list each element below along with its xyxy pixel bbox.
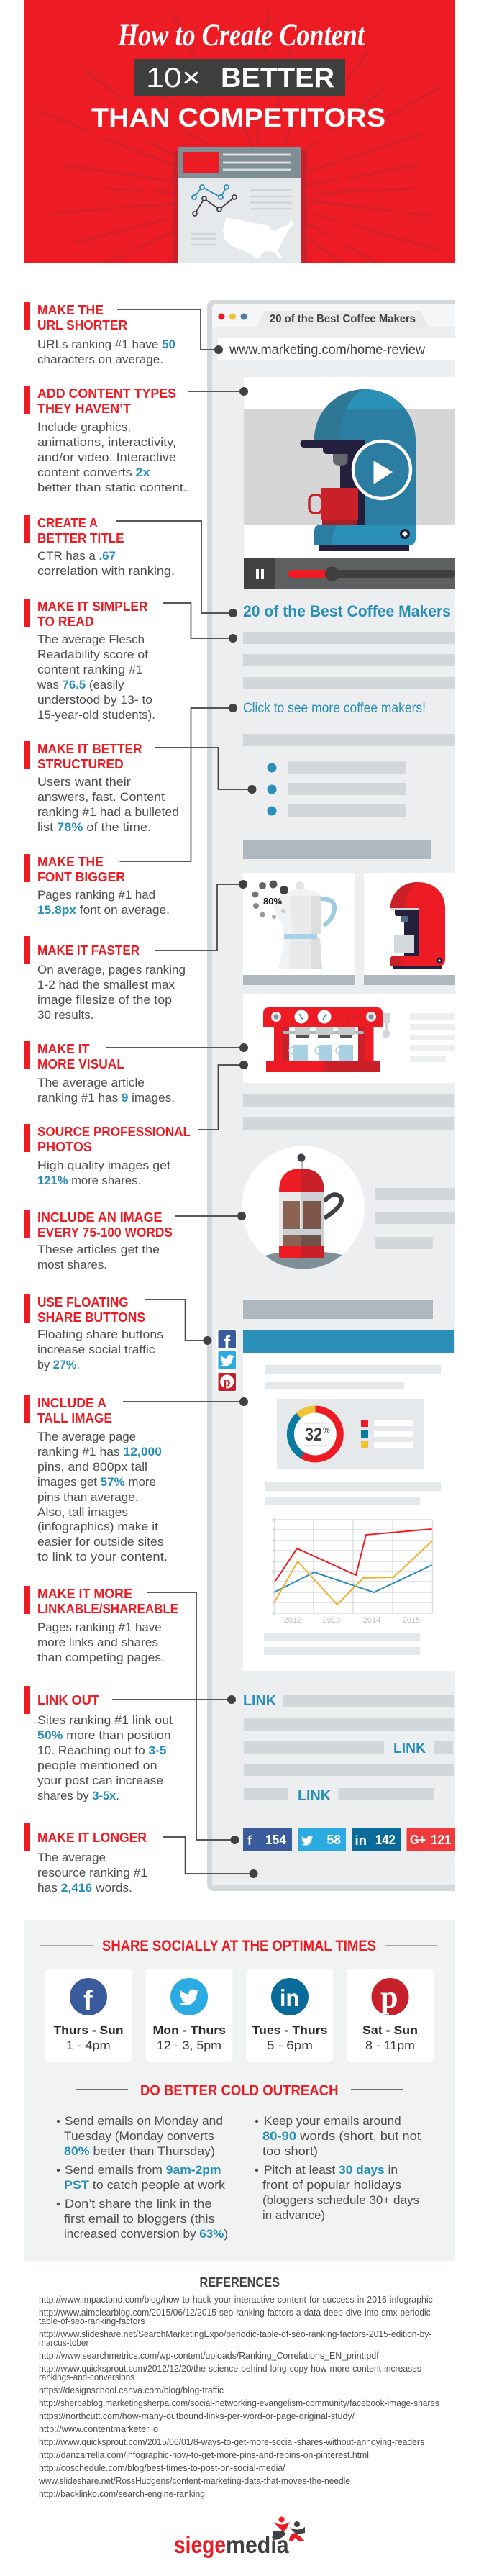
card: facebook time: 1 - 4pm <box>66 2038 111 2052</box>
links paragraph: LINK <box>393 1741 426 1756</box>
article title: 20 of the Best Coffee Makers <box>243 602 451 620</box>
tip: make the URL shorter <box>24 302 175 366</box>
tip: make it simpler to read: content ranking #1 <box>37 663 143 676</box>
url bar: www.marketing.com/home-review <box>229 343 425 358</box>
tip: make it more visual: The average article <box>37 1076 145 1089</box>
tip: include a tall image: ranking #1 has 12,000 <box>37 1445 162 1459</box>
tip: include a tall image: (infographics) make it <box>37 1520 158 1533</box>
tip: add content types: content converts 2x <box>37 466 150 479</box>
link text: Click to see more coffee makers! <box>243 701 426 716</box>
outreach tips right column: (bloggers schedule 30+ days <box>262 2193 419 2207</box>
tip: make it longer: resource ranking #1 <box>37 1866 147 1879</box>
tip: make it longer: The average <box>37 1851 106 1864</box>
browser title bar: 20 of the Best Coffee Makers <box>270 313 416 325</box>
outreach tips right column: too short) <box>262 2144 318 2158</box>
outreach tips left column: 80% better than Thursday) <box>64 2144 215 2158</box>
tip: include an image every 75-100 words: EVERY 75-100 WORDS <box>37 1225 173 1240</box>
tip: use floating share buttons: USE FLOATING <box>37 1294 129 1310</box>
url bar <box>218 338 455 360</box>
tip: make the URL shorter: URLs ranking #1 have 50 <box>37 337 175 351</box>
tip: link out: shares by 3-5x. <box>37 1789 119 1802</box>
tip: include an image every 75-100 words: most shares. <box>37 1258 107 1271</box>
card: pinterest time: 8 - 11pm <box>365 2038 415 2052</box>
tip: make it more visual: MAKE IT <box>37 1041 90 1056</box>
siegemedia logo: siege <box>174 2531 226 2558</box>
tip: make it more visual <box>24 1041 175 1105</box>
tip: make it more visual: ranking #1 has 9 images. <box>37 1091 175 1105</box>
tip: make it longer <box>24 1823 147 1895</box>
tip: make it simpler to read: understood by 13- to <box>37 693 152 707</box>
siegemedia logo: media <box>226 2531 289 2558</box>
tip: make it longer: has 2,416 words. <box>37 1881 132 1895</box>
tip: add content types: better than static content. <box>37 481 187 494</box>
outreach tips right column: in advance) <box>262 2208 325 2222</box>
title last line: THAN COMPETITORS <box>91 103 385 132</box>
tip: use floating share buttons: SHARE BUTTONS <box>37 1310 145 1325</box>
outreach tips left column: Send emails from 9am-2pm <box>65 2163 221 2177</box>
card: linkedin time: Tues - Thurs <box>252 2023 328 2037</box>
tip: make it simpler to read: was 76.5 (easily <box>37 678 124 691</box>
outreach tips left column: first email to bloggers (this <box>64 2212 214 2226</box>
outreach tips left column: increased conversion by 63%) <box>64 2227 228 2241</box>
references list: marcus-tober <box>39 2338 88 2348</box>
references list: http://www.quicksprout.com/2015/06/01/8-ways-to-get-more-social-shares-without-annoying-readers <box>39 2437 424 2447</box>
line chart <box>272 1518 433 1625</box>
browser window <box>207 300 455 1891</box>
twitter count: 58 <box>326 1833 341 1847</box>
references list: http://www.quicksprout.com/2012/12/20/the-science-behind-long-copy-how-more-content-increases- <box>39 2364 424 2374</box>
tip: make the font bigger: MAKE THE <box>37 854 104 869</box>
google plus count <box>407 1828 455 1851</box>
image card: red coffee maker <box>364 873 455 985</box>
references list: rankings-and-conversions <box>39 2372 134 2382</box>
share counters <box>243 1828 455 1851</box>
video controls <box>244 558 455 589</box>
links paragraph: LINK <box>298 1788 332 1804</box>
linkedin count: in <box>355 1833 367 1848</box>
tip: make the font bigger: FONT BIGGER <box>37 869 125 884</box>
donut legend <box>361 1420 413 1448</box>
tip: source professional photos: 121% more shares. <box>37 1174 141 1187</box>
tip: include a tall image: INCLUDE A <box>37 1395 106 1410</box>
icon: facebook: f <box>224 1332 231 1353</box>
tip: make the URL shorter: characters on average. <box>37 353 163 366</box>
outreach tips left column: Send emails on Monday and <box>65 2114 223 2128</box>
tip: make it better structured <box>24 741 179 834</box>
references list: https://designschool.canva.com/blog/blog-traffic <box>39 2385 224 2395</box>
image card: moka pot <box>243 873 355 985</box>
tip: make it faster: image filesize of the top <box>37 993 172 1007</box>
tip: make it better structured: MAKE IT BETTER <box>37 741 142 756</box>
tip: use floating share buttons: by 27%. <box>37 1358 80 1371</box>
tip: make it simpler to read: The average Flesch <box>37 632 145 646</box>
tip: make it simpler to read: Readability score of <box>37 648 148 661</box>
tip: make it better structured: list 78% of the time. <box>37 820 151 834</box>
tip: include a tall image: pins than average. <box>37 1490 138 1504</box>
infographic panel: donut <box>277 1399 424 1469</box>
coffee maker illustration <box>301 389 416 551</box>
tip: make the font bigger <box>24 854 170 917</box>
facebook count: f <box>247 1833 252 1848</box>
floating share buttons <box>216 1329 237 1392</box>
tip: make the font bigger: Pages ranking #1 had <box>37 888 155 902</box>
header document illustration <box>173 147 307 263</box>
tip: link out: people mentioned on <box>37 1759 157 1772</box>
outreach tips right column: front of popular holidays <box>262 2178 401 2192</box>
tip: include a tall image: images get 57% more <box>37 1475 156 1489</box>
title dark box <box>134 59 345 96</box>
image card: espresso machine <box>243 994 455 1083</box>
references list: https://northcutt.com/how-many-outbound-links-per-word-or-page-original-study/ <box>39 2411 355 2421</box>
tip: make it faster: MAKE IT FASTER <box>37 943 140 958</box>
heading: cold outreach: DO BETTER COLD OUTREACH <box>140 2082 338 2099</box>
panel: social timing and outreach <box>24 1920 455 2261</box>
tip: include an image every 75-100 words: INCLUDE AN IMAGE <box>37 1210 163 1225</box>
blue banner and white article panel <box>243 1330 455 1671</box>
tip: include a tall image: easier for outside sites <box>37 1535 164 1548</box>
tip: make it better structured: answers, fast. Content <box>37 790 165 804</box>
outreach tips right column <box>255 2114 421 2222</box>
card: pinterest time <box>347 1969 434 2062</box>
tip: add content types: Include graphics, <box>37 420 131 434</box>
references list <box>38 2295 439 2499</box>
title dark box: 10× <box>146 63 201 94</box>
references list: http://danzarrella.com/infographic-how-to-get-more-pins-and-repins-on-pinterest.html <box>39 2450 369 2460</box>
card: pinterest time: Sat - Sun <box>362 2023 418 2037</box>
links paragraph <box>243 1693 454 1804</box>
tip: include a tall image: pins, and 800px tall <box>37 1460 147 1474</box>
tip: create a better title: CTR has a .67 <box>37 549 116 563</box>
outreach tips right column: Pitch at least 30 days in <box>264 2163 398 2177</box>
tip: make it faster: 30 results. <box>37 1008 93 1022</box>
links paragraph: LINK <box>243 1693 277 1709</box>
linkedin count: 142 <box>375 1833 396 1847</box>
outreach tips left column: PST to catch people at work <box>64 2178 226 2192</box>
infographic panel: donut: 32 <box>305 1425 322 1445</box>
line chart: 2013 <box>323 1616 340 1625</box>
outreach tips left column: Tuesday (Monday converts <box>64 2129 214 2143</box>
french press image circle <box>242 1146 367 1274</box>
card: linkedin time <box>247 1969 333 2062</box>
bulleted list <box>243 734 455 859</box>
outreach tips left column <box>57 2114 228 2241</box>
tip: include a tall image: Also, tall images <box>37 1505 128 1519</box>
linkedin count <box>352 1828 401 1851</box>
tip: make it more linkable: more links and shares <box>37 1636 158 1649</box>
loader dots with 80%: 80% <box>263 896 282 907</box>
connector arrows from tips to page elements <box>106 309 257 1878</box>
tip: create a better title: CREATE A <box>37 515 98 530</box>
tip: include a tall image: TALL IMAGE <box>37 1410 112 1425</box>
text bars beside press <box>243 1188 455 1319</box>
tip: make it longer: MAKE IT LONGER <box>37 1830 147 1845</box>
tip: include an image every 75-100 words <box>24 1210 173 1271</box>
tip: include an image every 75-100 words: These articles get the <box>37 1243 160 1256</box>
references list: http://www.searchmetrics.com/wp-content/uploads/Ranking_Correlations_EN_print.pdf <box>39 2351 379 2361</box>
tip: make it better structured: ranking #1 had a bulleted <box>37 805 179 819</box>
references list: http://sherpablog.marketingsherpa.com/social-networking-evangelism-community/facebook-image-shares <box>39 2398 439 2408</box>
card: facebook time: Thurs - Sun <box>53 2023 124 2037</box>
tip: make it more linkable: Pages ranking #1 have <box>37 1620 162 1634</box>
tip: add content types: THEY HAVEN’T <box>37 401 132 416</box>
outreach tips right column: 80-90 words (short, but not <box>262 2129 421 2143</box>
tip: make it simpler to read: 15-year-old students). <box>37 708 155 722</box>
references list: http://www.contentmarketer.io <box>39 2424 158 2434</box>
tip: use floating share buttons: Floating share buttons <box>37 1328 163 1341</box>
tip: create a better title <box>24 515 175 578</box>
outreach tips left column: Don’t share the link in the <box>65 2197 211 2210</box>
card: facebook time: f <box>83 1986 93 2016</box>
title dark box: BETTER <box>221 63 334 94</box>
tip: source professional photos: PHOTOS <box>37 1139 92 1154</box>
icon: twitter <box>219 1351 236 1369</box>
tip: make it simpler to read <box>24 599 155 722</box>
tip: create a better title: correlation with ranking. <box>37 564 175 578</box>
tip: link out: 50% more than position <box>37 1728 171 1742</box>
card: facebook time <box>45 1969 132 2062</box>
tip: make it faster: On average, pages ranking <box>37 963 186 976</box>
google plus count: 121 <box>431 1833 452 1847</box>
header banner <box>24 0 455 263</box>
tip: include a tall image: The average page <box>37 1430 136 1443</box>
tip: make it simpler to read: MAKE IT SIMPLER <box>37 599 148 614</box>
paragraph bars <box>243 1094 454 1130</box>
google plus count: G+ <box>410 1833 426 1847</box>
tip: use floating share buttons <box>24 1294 163 1371</box>
tip: link out: 10. Reaching out to 3-5 <box>37 1743 167 1757</box>
tip: make it better structured: Users want their <box>37 775 131 789</box>
references heading: REFERENCES <box>200 2275 280 2290</box>
references list: http://backlinko.com/search-engine-ranking <box>39 2489 205 2499</box>
tip: make it more linkable: LINKABLE/SHAREABLE <box>37 1601 178 1616</box>
line chart: 2015 <box>403 1616 420 1625</box>
tip: source professional photos: High quality images get <box>37 1158 170 1172</box>
tip: make it better structured: STRUCTURED <box>37 756 124 771</box>
references list: http://www.impactbnd.com/blog/how-to-hack-your-interactive-content-for-success-in-2016-infographic <box>39 2295 433 2305</box>
tip: include a tall image <box>24 1395 168 1564</box>
tip: add content types: ADD CONTENT TYPES <box>37 386 176 401</box>
tip: link out <box>24 1686 173 1802</box>
tip: make it more visual: MORE VISUAL <box>37 1056 124 1071</box>
logo icon <box>273 2517 305 2541</box>
references list: http://www.aimclearblog.com/2015/06/12/2015-seo-ranking-factors-a-data-deep-dive-into-smx-periodic- <box>39 2308 434 2318</box>
icon: pinterest: p <box>223 1374 231 1389</box>
heading: share socially: SHARE SOCIALLY AT THE OPTIMAL TIMES <box>102 1938 376 1954</box>
tip: make it more linkable: than competing pages. <box>37 1651 165 1664</box>
tip: make it faster <box>24 936 186 1022</box>
card: twitter time: Mon - Thurs <box>152 2023 226 2037</box>
tip: make it more linkable <box>24 1586 178 1664</box>
article text placeholder bars <box>243 632 455 689</box>
references list: www.slideshare.net/RossHudgens/content-marketing-data-that-moves-the-needle <box>38 2476 350 2486</box>
references list: http://coschedule.com/blog/best-times-to-post-on-social-media/ <box>39 2463 285 2473</box>
tip: link out: Sites ranking #1 link out <box>37 1713 173 1727</box>
tip: link out: LINK OUT <box>37 1692 100 1707</box>
card: twitter time: 12 - 3, 5pm <box>157 2038 221 2052</box>
tip: source professional photos <box>24 1124 191 1187</box>
card: twitter time <box>145 1969 233 2062</box>
references list: table-of-seo-ranking-factors <box>39 2316 145 2326</box>
references list: http://www.slideshare.net/SearchMarketingExpo/periodic-table-of-seo-ranking-factors-2015-edition-by- <box>39 2329 431 2339</box>
tip: make the font bigger: 15.8px font on average. <box>37 903 170 917</box>
browser title bar <box>212 304 455 327</box>
tip: make it faster: 1-2 had the smallest max <box>37 978 175 992</box>
tip: link out: your post can increase <box>37 1774 163 1787</box>
title script line: How to Create Content <box>117 19 366 53</box>
tip: make the URL shorter: URL SHORTER <box>37 317 127 332</box>
tip: add content types <box>24 386 187 494</box>
tip: make the URL shorter: MAKE THE <box>37 302 104 317</box>
card: linkedin time: in <box>280 1985 299 2011</box>
tip: make it simpler to read: TO READ <box>37 614 93 629</box>
facebook count <box>243 1828 292 1851</box>
line chart: 2014 <box>363 1616 380 1625</box>
tip: add content types: animations, interactivity, <box>37 435 176 449</box>
infographic panel: donut: % <box>323 1426 330 1435</box>
loader dots with 80% <box>252 881 288 919</box>
tip: use floating share buttons: increase social traffic <box>37 1343 155 1356</box>
tip: create a better title: BETTER TITLE <box>37 530 124 545</box>
twitter count <box>298 1828 346 1851</box>
tip: include a tall image: to link to your content. <box>37 1550 168 1564</box>
card: linkedin time: 5 - 6pm <box>267 2038 313 2052</box>
card: pinterest time: p <box>380 1979 398 2015</box>
facebook count: 154 <box>265 1833 286 1847</box>
tip: source professional photos: SOURCE PROFESSIONAL <box>37 1124 191 1139</box>
siegemedia logo <box>174 2517 305 2558</box>
video player with coffee maker <box>244 377 455 589</box>
tip: add content types: and/or video. Interactive <box>37 450 176 464</box>
outreach tips right column: Keep your emails around <box>264 2114 401 2128</box>
tip: make it more linkable: MAKE IT MORE <box>37 1586 132 1601</box>
line chart: 2012 <box>284 1616 301 1625</box>
